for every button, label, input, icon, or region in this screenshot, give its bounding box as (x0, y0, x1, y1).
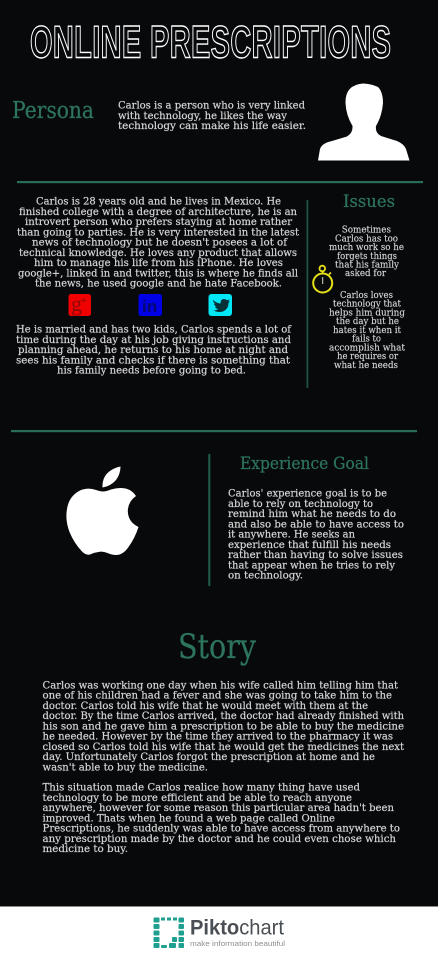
biography paragraph two (16, 324, 292, 377)
experience goal text (228, 488, 404, 582)
issues text two: he requires or (337, 351, 398, 362)
biography paragraph one: news of technology but he doesn't posees a lot of (32, 236, 288, 248)
issues text two: the day but he (336, 316, 399, 327)
persona summary (118, 100, 306, 132)
divider (208, 454, 210, 586)
biography paragraph one: than going to parties. He is very interested in the latest (17, 226, 300, 238)
issues text one: asked for (345, 268, 386, 279)
experience goal text: and also be able to have access to (228, 518, 404, 530)
issues text one: much work so he (329, 242, 404, 253)
biography paragraph one: google+, linked in and twitter, this is where he finds all (18, 267, 299, 279)
icon: apple logo (66, 466, 138, 555)
persona summary: with technology, he likes the way (118, 110, 287, 122)
panel: issues (313, 192, 405, 371)
issues text one (329, 225, 404, 279)
biography paragraph two: sees his family and checks if there is something that (16, 354, 291, 366)
icon: google plus (68, 291, 91, 316)
story paragraph one: day. Unfortunately Carlos forgot the prescription at home and he (42, 751, 375, 763)
issues text two: what he needs (334, 360, 398, 371)
experience goal text: remind him what he needs to do (228, 508, 396, 520)
piktochart logo mark (154, 918, 184, 948)
story paragraph one: he needed. However by the time they arrived to the pharmacy it was (42, 730, 393, 742)
biography paragraph two: He is married and has two kids, Carlos spends a lot of (16, 324, 292, 336)
biography paragraph two: his family needs before going to bed. (57, 365, 246, 377)
divider (17, 181, 423, 183)
piktochart tagline: make information beautiful (190, 939, 285, 948)
story paragraph one: closed so Carlos told his wife that he would get the medicines the next (42, 741, 405, 753)
biography paragraph two: time during the day at his job giving instructions and (16, 334, 291, 346)
story paragraph one: Carlos was working one day when his wife called him telling him that (42, 679, 399, 691)
experience goal text: it anywhere. He seeks an (228, 529, 355, 541)
icon: person silhouette (318, 84, 410, 160)
story paragraph two: improved. Thats when he found a web page called Online (42, 812, 335, 824)
story paragraph one (42, 679, 405, 773)
issues text two: helps him during (329, 308, 405, 318)
experience goal text: that appear when he tries to rely (228, 559, 395, 571)
issues text two: fails to (352, 334, 381, 345)
icon: linkedin (138, 294, 162, 316)
issues text one: Carlos has too (335, 233, 398, 244)
biography paragraph one: finished college with a degree of architecture, he is an (19, 206, 297, 218)
experience goal text: able to rely on technology to (228, 498, 373, 510)
story paragraph one: one of his children had a fever and she was going to take him to the (42, 690, 392, 702)
icon: google plus: g (71, 291, 82, 316)
icon: twitter (208, 294, 232, 316)
biography paragraph one: the news, he used google and he hate Facebook. (35, 278, 282, 290)
story paragraph two: medicine to buy. (42, 843, 128, 855)
story heading: Story (178, 627, 257, 667)
experience goal text: experience that fulfill his needs (228, 539, 391, 551)
issues heading: Issues (343, 192, 395, 212)
divider (11, 430, 417, 432)
biography paragraph one: technical knowledge. He loves any product that allows (19, 247, 297, 259)
icon: stopwatch (313, 266, 332, 292)
biography paragraph one (17, 196, 300, 290)
issues text two: technology that (333, 299, 401, 310)
issues text two: hates it when it (333, 325, 401, 336)
issues text one: that his family (335, 260, 400, 270)
story paragraph two (42, 782, 400, 855)
persona heading: Persona (12, 98, 94, 124)
title: ONLINE PRESCRIPTIONS (30, 18, 391, 68)
panel: biography (16, 196, 300, 377)
story paragraph one: wasn't able to buy the medicine. (42, 761, 208, 773)
issues text one: Sometimes (342, 225, 391, 236)
panel: story (42, 627, 405, 855)
persona summary: Carlos is a person who is very linked (118, 100, 305, 112)
story paragraph two: Prescriptions, he suddenly was able to have access from anywhere to (42, 823, 400, 835)
story paragraph two: technology to be more efficient and be able to reach anyone (42, 792, 352, 804)
story paragraph two: This situation made Carlos realice how many thing have used (42, 782, 360, 794)
biography paragraph one: introvert person who prefers staying at home rather (25, 216, 293, 228)
icon: google plus: + (81, 296, 87, 307)
story paragraph one: doctor. By the time Carlos arrived, the doctor had already finished with (42, 710, 404, 722)
panel: experience goal (228, 454, 404, 582)
issues text one: forgets things (337, 251, 397, 262)
piktochart wordmark: Piktochart (190, 916, 284, 940)
experience goal heading: Experience Goal (240, 454, 369, 474)
experience goal text: on technology. (228, 570, 303, 582)
biography paragraph one: Carlos is 28 years old and he lives in Mexico. He (36, 196, 281, 208)
divider (306, 200, 308, 388)
experience goal text: Carlos' experience goal is to be (228, 488, 387, 500)
biography paragraph two: planning ahead, he returns to his home at night and (18, 344, 288, 356)
panel: persona (12, 84, 410, 160)
biography paragraph one: him to manage his life from his iPhone. He loves (34, 257, 283, 269)
issues text two (329, 290, 405, 371)
story paragraph two: any prescription made by the doctor and he could even chose which (42, 833, 396, 845)
issues text two: accomplish what (329, 342, 405, 353)
story paragraph one: his son and he gave him a prescription to be able to buy the medicine (42, 720, 404, 732)
icon: linkedin: in (142, 297, 157, 316)
issues text two: Carlos loves (340, 290, 393, 301)
persona summary: technology can make his life easier. (118, 120, 306, 132)
story paragraph one: doctor. Carlos told his wife that he would meet with them at the (42, 700, 368, 712)
footer band (0, 906, 438, 960)
experience goal text: rather than having to solve issues (228, 549, 403, 561)
story paragraph two: anywhere, however for some reason this particular area hadn't been (42, 802, 394, 814)
